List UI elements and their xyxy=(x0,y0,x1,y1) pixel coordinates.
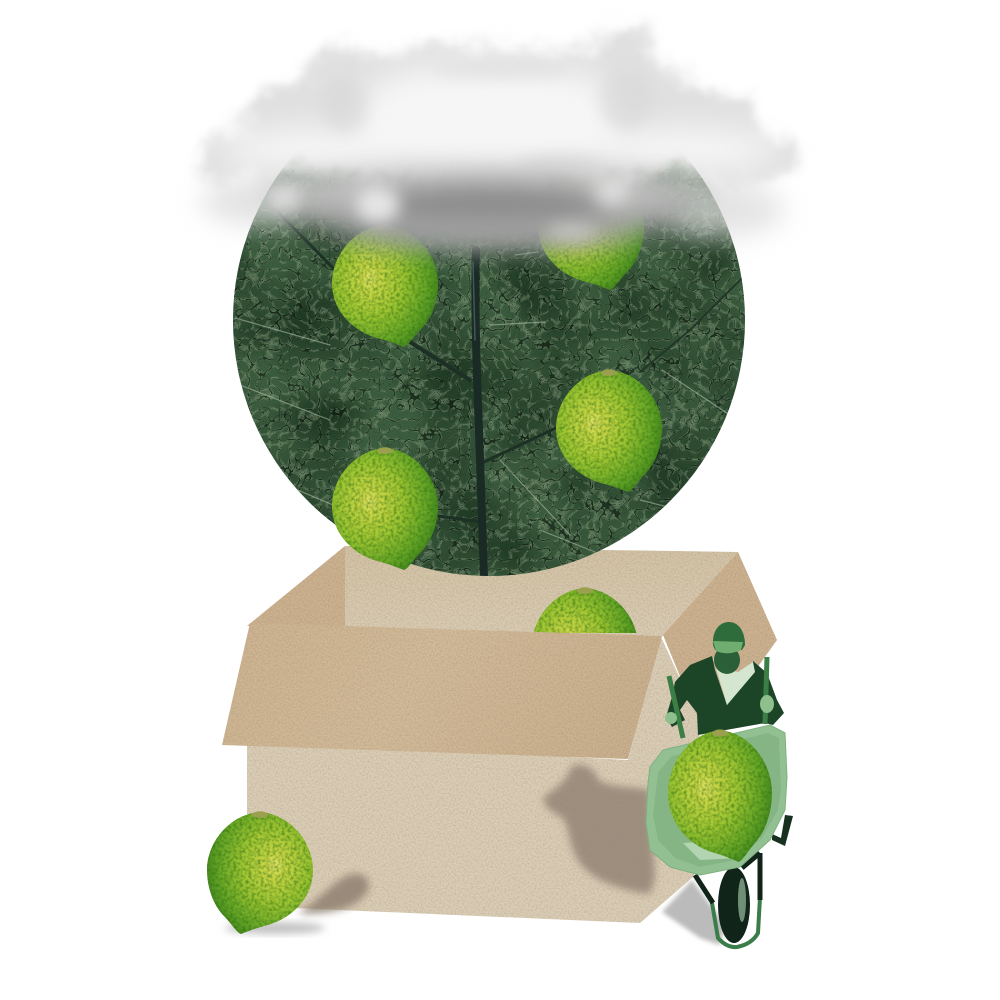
ground shadow of lime xyxy=(225,922,325,934)
tray light patch under lime xyxy=(683,838,760,860)
box front flap xyxy=(222,623,662,759)
cloud xyxy=(195,23,800,248)
cloud lower puffs xyxy=(268,175,629,241)
tray xyxy=(646,725,787,875)
lime: upper left xyxy=(332,224,438,347)
handle right xyxy=(765,657,767,724)
shadow of lime on box xyxy=(300,874,369,914)
cloud lower edge haze xyxy=(340,216,640,248)
leaf veins xyxy=(235,212,745,578)
lime: on the ground xyxy=(207,811,313,934)
box back and inner flaps xyxy=(247,546,777,725)
ground shadow of wheelbarrow xyxy=(662,880,725,945)
cloud billows xyxy=(323,62,651,175)
cloud underside haze xyxy=(200,165,785,245)
cloud body xyxy=(195,23,800,190)
cap xyxy=(713,622,745,650)
shirt xyxy=(713,658,755,705)
leaf circle xyxy=(233,156,745,576)
illustration: collage xyxy=(194,22,802,950)
head xyxy=(714,646,740,674)
lime: inside box xyxy=(534,587,636,633)
handle left xyxy=(669,676,683,738)
cloud shadow xyxy=(375,184,605,232)
shadow of figure on box xyxy=(543,765,655,894)
tray inner xyxy=(653,733,781,867)
figure with wheelbarrow xyxy=(646,622,793,947)
box front body xyxy=(247,637,700,923)
cloud highlights xyxy=(220,62,780,172)
cap visor xyxy=(713,641,743,653)
hands xyxy=(665,695,774,724)
torso and arms xyxy=(666,656,784,735)
cloud soft lower transition xyxy=(260,166,720,214)
lime: mid right xyxy=(556,369,662,492)
wheel and frame xyxy=(695,815,793,947)
lime: upper right xyxy=(538,167,644,290)
lime in wheelbarrow xyxy=(668,729,772,862)
lime: falling into box xyxy=(332,447,438,570)
